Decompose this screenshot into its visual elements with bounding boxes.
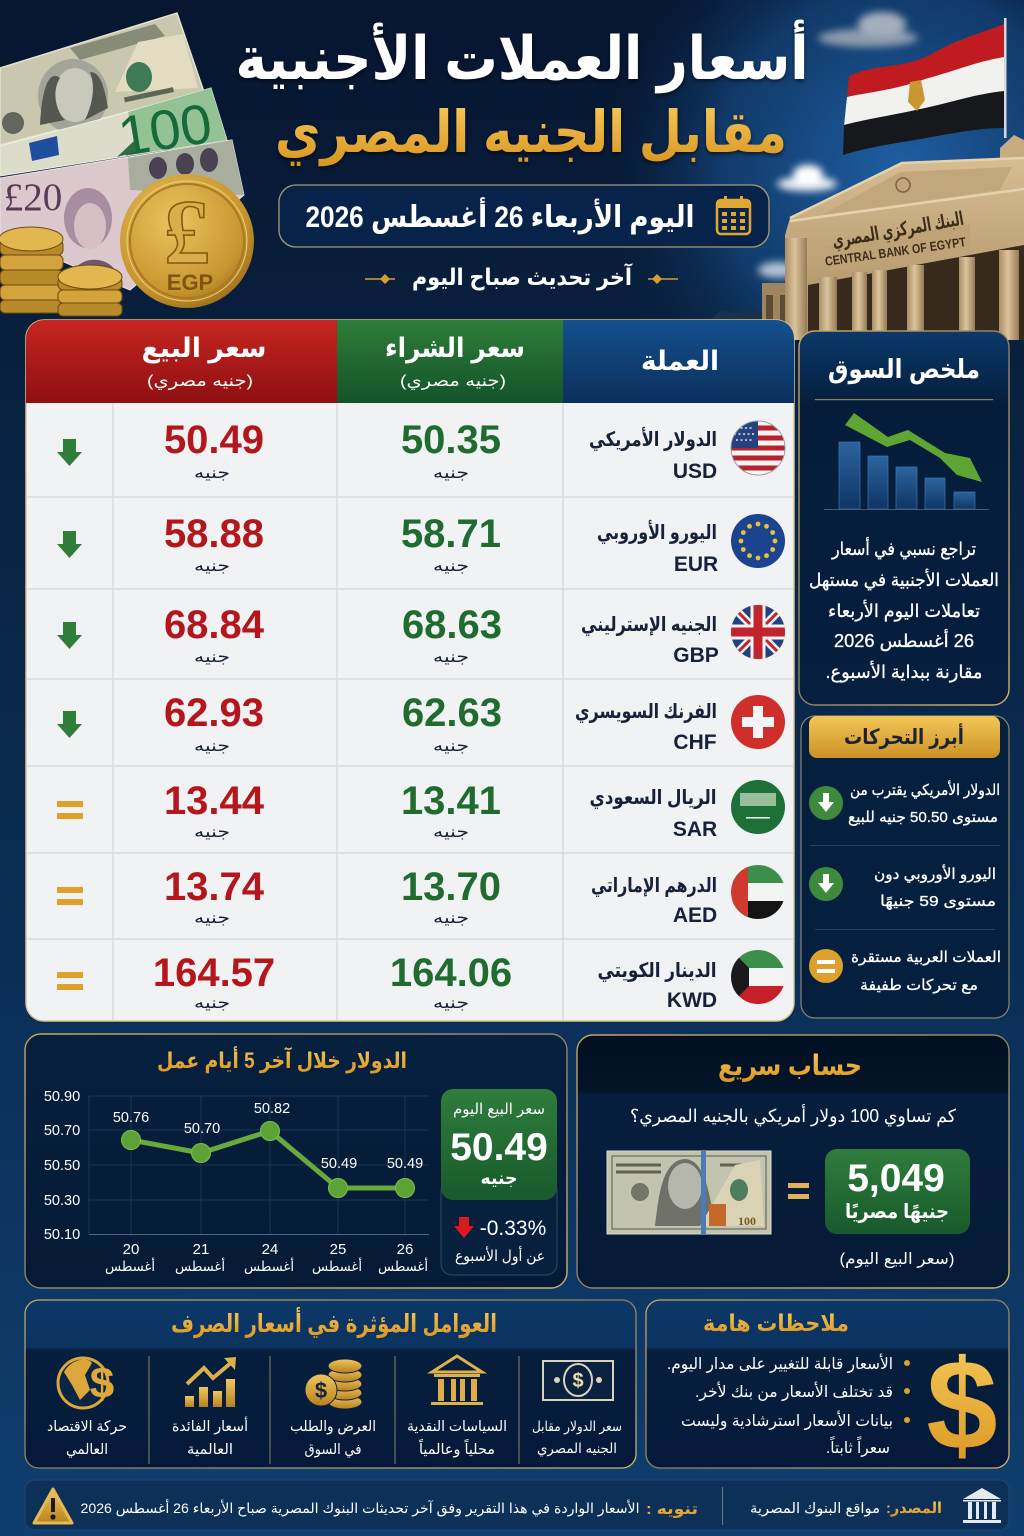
line chart: أغسطس — [244, 1257, 294, 1275]
row: USD: USD — [673, 460, 717, 483]
row: USD: 50.35 — [401, 418, 501, 462]
icon: bank — [963, 1488, 1001, 1523]
title — [236, 19, 808, 167]
weekly change box: -0.33% — [480, 1217, 546, 1240]
row: KWD: KWD — [667, 989, 717, 1012]
line chart: 26 — [397, 1241, 413, 1258]
row: SAR: 13.44 — [164, 779, 265, 823]
line chart: أغسطس — [105, 1257, 155, 1275]
row: CHF: 62.63 — [402, 691, 502, 735]
factor: interest rates: أسعار الفائدة — [172, 1416, 248, 1435]
movement: arab currencies — [809, 949, 1001, 994]
panel: market summary: مقارنة ببداية الأسبوع. — [826, 661, 982, 683]
panel: top movements — [801, 716, 1009, 1018]
factor: dollar vs pound: $ — [572, 1370, 584, 1392]
factor: monetary policy: محلياً وعالمياً — [418, 1439, 495, 1458]
title: مقابل الجنيه المصري — [275, 100, 787, 167]
panel: market summary: تراجع نسبي في أسعار — [831, 537, 976, 560]
line chart: أغسطس — [312, 1257, 362, 1275]
movement: euro: مستوى 59 جنيهًا — [880, 893, 996, 910]
row: SAR: جنيه — [194, 824, 230, 841]
flag: UK — [731, 605, 785, 659]
panel: market summary: تعاملات اليوم الأربعاء — [828, 600, 980, 622]
illustration: Egyptian flag — [843, 18, 1006, 155]
heading pill: أبرز التحركات — [844, 722, 964, 749]
table header row — [26, 320, 794, 403]
table header row: (جنيه مصري) — [400, 373, 506, 391]
row: USD: جنيه — [194, 465, 230, 482]
factor: monetary policy: السياسات النقدية — [407, 1419, 507, 1435]
row: CHF: 62.93 — [164, 691, 264, 735]
source text: المصدر: — [886, 1500, 942, 1517]
sell price callout — [441, 1089, 557, 1200]
row: CHF: جنيه — [433, 738, 469, 755]
footer bar — [25, 1480, 1009, 1530]
row: SAR: 13.41 — [401, 779, 501, 823]
illustration: banknotes and gold coins — [0, 13, 254, 316]
large EGP coin: £ — [164, 181, 210, 283]
factor: interest rates: العالمية — [187, 1442, 233, 1458]
row: AED: الدرهم الإماراتي — [591, 875, 717, 898]
table header row: سعر البيع — [142, 333, 266, 364]
factor: interest rates — [172, 1357, 248, 1458]
row: EUR: جنيه — [433, 558, 469, 575]
factor: dollar vs pound: الجنيه المصري — [537, 1441, 617, 1457]
row: AED: 13.70 — [401, 865, 501, 909]
row: USD — [57, 418, 785, 483]
line chart: 24 — [262, 1241, 278, 1258]
factor: supply and demand: في السوق — [304, 1442, 362, 1458]
notes list: بيانات الأسعار استرشادية وليست — [681, 1410, 893, 1431]
flag: Kuwait — [731, 950, 785, 1004]
notes list: قد تختلف الأسعار من بنك لأخر. — [695, 1381, 893, 1402]
icon: down arrow — [57, 439, 82, 466]
table header row: سعر الشراء — [385, 333, 525, 364]
row: EUR: جنيه — [194, 558, 230, 575]
row: GBP — [57, 603, 785, 667]
icon: equal sign — [57, 801, 83, 819]
source text: مواقع البنوك المصرية — [750, 1501, 880, 1517]
row: EUR: 58.88 — [164, 512, 264, 556]
title: أسعار العملات الأجنبية — [236, 19, 808, 94]
weekly change box — [441, 1180, 557, 1275]
icon: calendar — [717, 196, 750, 234]
line chart: 50.30 — [44, 1193, 80, 1209]
illustration: clouds — [758, 12, 918, 278]
row: AED: جنيه — [433, 910, 469, 927]
icon: equal sign — [57, 887, 83, 905]
disclaimer text: تنويه : — [646, 1501, 698, 1518]
row: GBP: GBP — [673, 644, 719, 667]
row: EUR: 58.71 — [401, 512, 501, 556]
flag: USA — [731, 421, 785, 475]
table header row: (جنيه مصري) — [147, 373, 253, 391]
line chart: أغسطس — [175, 1257, 225, 1275]
line chart: أغسطس — [378, 1257, 428, 1275]
panel: quick calculation: كم تساوي 100 دولار أمريكي بالجنيه المصري؟ — [630, 1104, 956, 1127]
panel: quick calculation: حساب سريع — [718, 1050, 862, 1082]
line chart: 50.49 — [321, 1156, 357, 1172]
row: GBP: 68.84 — [164, 603, 265, 647]
row: EUR: EUR — [674, 553, 718, 576]
illustration: 100 dollar bill: 100 — [738, 1214, 756, 1228]
row: AED: 13.74 — [164, 865, 265, 909]
factor: dollar vs pound: سعر الدولار مقابل — [532, 1419, 622, 1435]
source text — [750, 1500, 942, 1517]
icon: down arrow — [57, 622, 82, 649]
chart icon: falling bars with arrow — [824, 413, 989, 510]
icon: warning triangle — [34, 1489, 72, 1523]
row: CHF: CHF — [673, 731, 717, 754]
result box: 5,049 — [847, 1157, 945, 1200]
notes list — [667, 1353, 910, 1458]
panel: quick calculation — [577, 1035, 1009, 1288]
row: GBP: جنيه — [433, 649, 469, 666]
row: KWD: 164.57 — [153, 951, 275, 995]
factor: global economy: العالمي — [66, 1442, 108, 1458]
panel: exchange rate table — [26, 320, 794, 1021]
euro note: 100 — [114, 91, 216, 168]
factor: monetary policy — [407, 1356, 507, 1458]
pound note: £20 — [4, 176, 62, 219]
flag: UAE — [731, 865, 785, 919]
factor: supply and demand: $ — [315, 1378, 327, 1403]
panel: important notes: ملاحظات هامة — [703, 1310, 849, 1336]
row: AED: جنيه — [194, 910, 230, 927]
row: KWD — [57, 950, 785, 1012]
euro note — [0, 88, 227, 176]
sell price callout: سعر البيع اليوم — [453, 1101, 545, 1118]
panel: factors affecting exchange rates — [25, 1300, 636, 1468]
line chart: 50.49 — [387, 1156, 423, 1172]
icon: gold dollar sign: $ — [926, 1334, 998, 1477]
notes list: سعراً ثابتاً. — [826, 1435, 890, 1458]
row: GBP: جنيه — [194, 649, 230, 666]
row: AED — [57, 865, 785, 927]
line chart: 25 — [330, 1241, 346, 1258]
row: KWD: جنيه — [433, 995, 469, 1012]
movement: dollar: مستوى 50.50 جنيه للبيع — [848, 809, 998, 826]
panel: dollar over last 5 working days — [25, 1034, 567, 1288]
weekly change box: عن أول الأسبوع — [455, 1246, 545, 1265]
line chart: 50.70 — [44, 1123, 80, 1139]
result box — [825, 1149, 970, 1234]
line chart: 50.10 — [44, 1227, 80, 1243]
row: GBP: 68.63 — [402, 603, 502, 647]
panel: factors affecting exchange rates: العوامل المؤثرة في أسعار الصرف — [171, 1307, 497, 1339]
line chart — [44, 1089, 429, 1275]
pound note — [0, 140, 244, 290]
row: USD: الدولار الأمريكي — [589, 426, 717, 452]
panel: dollar over last 5 working days: الدولار خلال آخر 5 أيام عمل — [157, 1045, 407, 1074]
line chart: 21 — [193, 1241, 209, 1258]
panel: important notes — [646, 1300, 1009, 1477]
row: CHF: الفرنك السويسري — [575, 701, 717, 724]
row: AED: AED — [673, 904, 717, 927]
factor: supply and demand: العرض والطلب — [290, 1419, 376, 1435]
factor: global economy: حركة الاقتصاد — [47, 1419, 127, 1435]
dollar note — [0, 13, 204, 145]
sell price callout: جنيه — [480, 1168, 518, 1188]
disclaimer text: الأسعار الواردة في هذا التقرير وفق آخر تحديثات البنوك المصرية صباح الأربعاء 26 أغسطس 2026 — [81, 1499, 639, 1517]
notes list: الأسعار قابلة للتغيير على مدار اليوم. — [667, 1353, 893, 1374]
movement: euro: اليورو الأوروبي دون — [874, 864, 996, 884]
icon: down arrow — [57, 531, 82, 558]
factor: supply and demand — [290, 1359, 376, 1458]
flag: Saudi Arabia — [731, 780, 785, 834]
equals sign — [788, 1183, 809, 1199]
factor: global economy: $ — [90, 1359, 114, 1408]
row: SAR — [57, 779, 785, 841]
sell price callout: 50.49 — [450, 1126, 548, 1169]
movement: dollar: الدولار الأمريكي يقترب من — [850, 780, 1000, 800]
panel: market summary: 26 أغسطس 2026 — [834, 629, 974, 651]
factor: dollar vs pound — [532, 1361, 622, 1457]
row: KWD: 164.06 — [390, 951, 512, 995]
large EGP coin: EGP — [167, 270, 213, 295]
illustration: 100 dollar bill — [607, 1151, 771, 1234]
row: EUR — [57, 512, 785, 576]
coin stacks — [0, 227, 122, 316]
row: KWD: الدينار الكويتي — [598, 960, 716, 983]
icon: equal sign — [57, 972, 83, 990]
movement: euro — [809, 864, 996, 910]
table header row: العملة — [641, 346, 719, 376]
row: GBP: الجنيه الإسترليني — [581, 614, 717, 637]
line chart: 20 — [123, 1241, 139, 1258]
row: SAR: الريال السعودي — [590, 787, 716, 810]
row: SAR: SAR — [673, 818, 717, 841]
last update line — [365, 262, 678, 291]
row: SAR: جنيه — [433, 824, 469, 841]
line chart: 50.90 — [44, 1089, 80, 1105]
illustration: Central Bank of Egypt building — [762, 135, 1024, 340]
line chart: 50.76 — [113, 1110, 149, 1126]
row: CHF — [57, 691, 785, 755]
line chart: 50.82 — [254, 1101, 290, 1117]
row: USD: 50.49 — [164, 418, 264, 462]
row: KWD: جنيه — [194, 995, 230, 1012]
panel: quick calculation: (سعر البيع اليوم) — [840, 1251, 954, 1269]
last update line: آخر تحديث صباح اليوم — [412, 262, 633, 291]
flag: EU — [731, 514, 785, 568]
icon: down arrow — [57, 711, 82, 738]
date pill — [279, 185, 769, 247]
date pill: اليوم الأربعاء 26 أغسطس 2026 — [305, 197, 694, 235]
panel: market summary: ملخص السوق — [828, 354, 980, 385]
panel: market summary: العملات الأجنبية في مستهل — [809, 569, 999, 591]
illustration: distant skyline — [712, 308, 765, 320]
illustration: Central Bank of Egypt building: CENTRAL BANK OF EGYPT — [824, 234, 967, 269]
heading pill — [809, 716, 1000, 758]
large EGP coin — [120, 174, 254, 308]
panel: market summary — [799, 331, 1009, 705]
row: EUR: اليورو الأوروبي — [597, 519, 717, 545]
movement: arab currencies: مع تحركات طفيفة — [860, 977, 978, 994]
movement: dollar — [809, 780, 1000, 826]
movement: arab currencies: العملات العربية مستقرة — [851, 949, 1001, 966]
row: USD: جنيه — [433, 465, 469, 482]
flag: Switzerland — [731, 695, 785, 749]
line chart: 50.70 — [184, 1121, 220, 1137]
result box: جنيهًا مصريًا — [845, 1201, 949, 1223]
row: CHF: جنيه — [194, 738, 230, 755]
line chart: 50.50 — [44, 1158, 80, 1174]
factor: global economy — [47, 1358, 127, 1458]
